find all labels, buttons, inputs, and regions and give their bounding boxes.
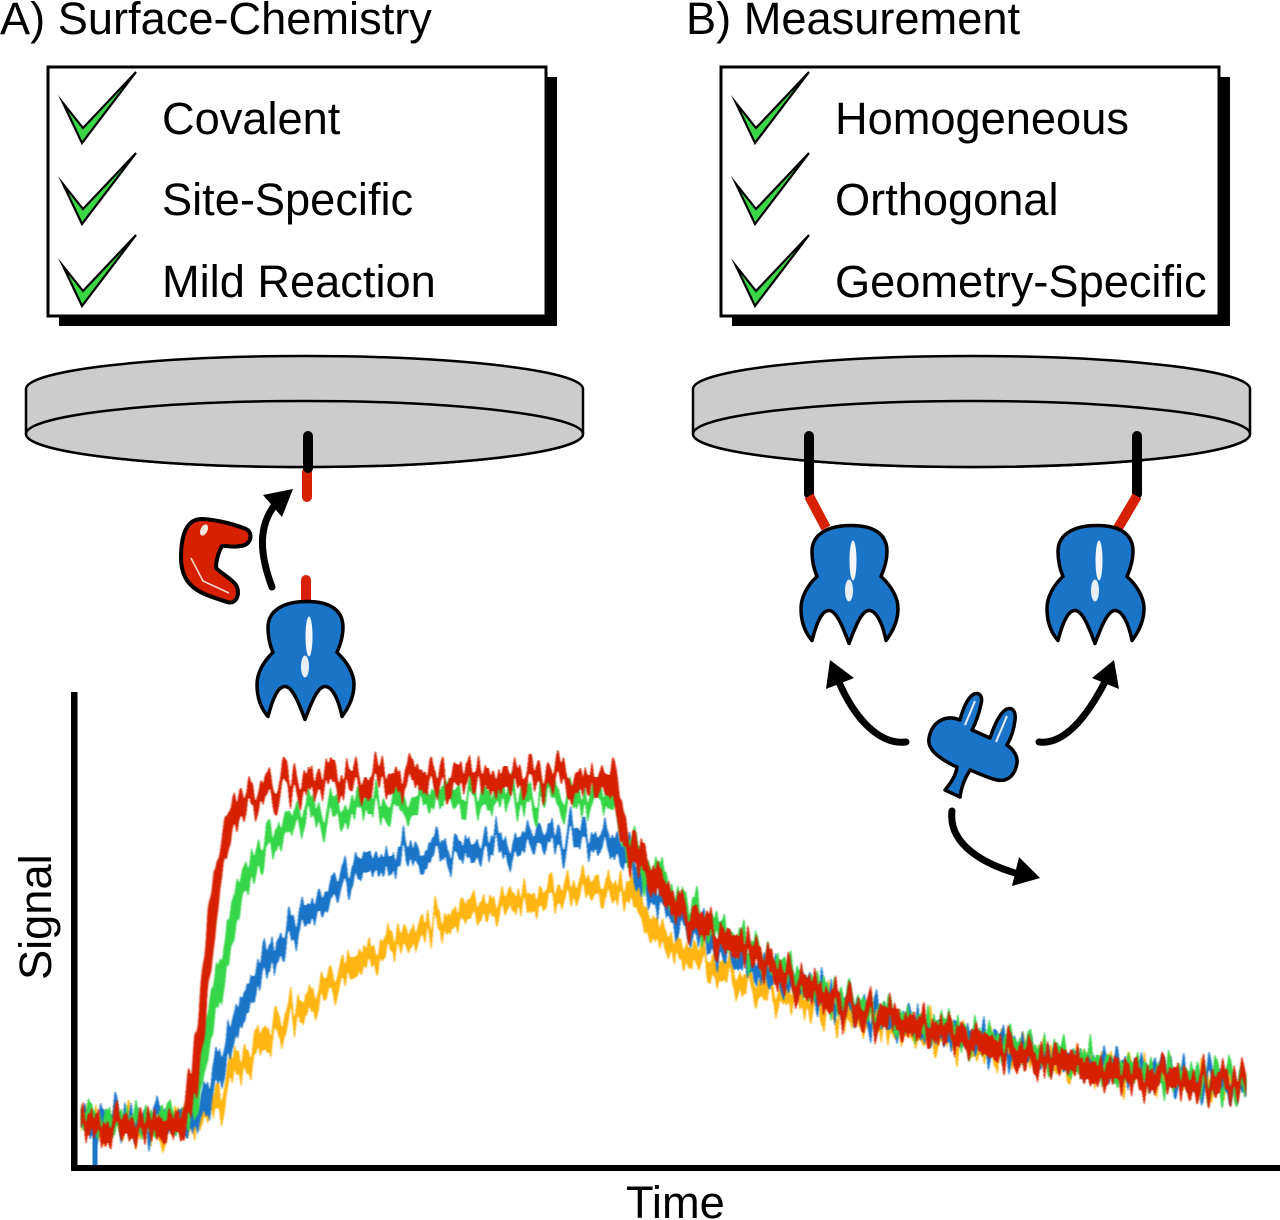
item: Geometry-Specific: Geometry-Specific	[835, 256, 1207, 307]
blue noise spike near baseline	[92, 1135, 98, 1165]
panel: measurement checklist	[721, 67, 1230, 326]
icon: blue analyte plug	[929, 694, 1017, 797]
arrow: reaction to surface	[262, 489, 293, 587]
yellow trace	[82, 887, 1245, 1124]
item: Covalent: Covalent	[162, 93, 341, 144]
icon: red protein	[181, 519, 251, 603]
arrow: to left protein	[826, 660, 906, 742]
item: Homogeneous: Homogeneous	[835, 93, 1129, 144]
item: Mild Reaction: Mild Reaction	[162, 256, 436, 307]
sensor disc B	[693, 356, 1250, 467]
icon: check mark mild reaction	[63, 235, 136, 306]
y axis	[71, 692, 78, 1171]
item: Orthogonal: Orthogonal	[835, 174, 1059, 225]
panel: surface chemistry checklist	[48, 67, 557, 326]
chart: signal vs time sensorgram	[10, 692, 1280, 1220]
right tethered protein, panel B	[1047, 436, 1144, 644]
y axis label: Signal	[10, 854, 61, 980]
blue trace	[82, 838, 1245, 1122]
icon: check mark site-specific	[63, 153, 136, 224]
linker on disc A	[307, 436, 308, 497]
sensor disc A	[26, 356, 583, 467]
arrow: dissociation	[952, 811, 1040, 886]
red trace	[82, 778, 1245, 1127]
left tethered protein, panel B	[801, 436, 898, 644]
item: Site-Specific: Site-Specific	[162, 174, 413, 225]
arrow: to right protein	[1039, 660, 1119, 742]
blue capture protein with linker, panel A	[257, 580, 354, 720]
x axis	[71, 1165, 1280, 1171]
green trace	[82, 795, 1245, 1122]
icon: check mark geometry-specific	[736, 235, 809, 306]
icon: check mark homogeneous	[736, 72, 809, 143]
icon: check mark orthogonal	[736, 153, 809, 224]
icon: check mark covalent	[63, 72, 136, 143]
